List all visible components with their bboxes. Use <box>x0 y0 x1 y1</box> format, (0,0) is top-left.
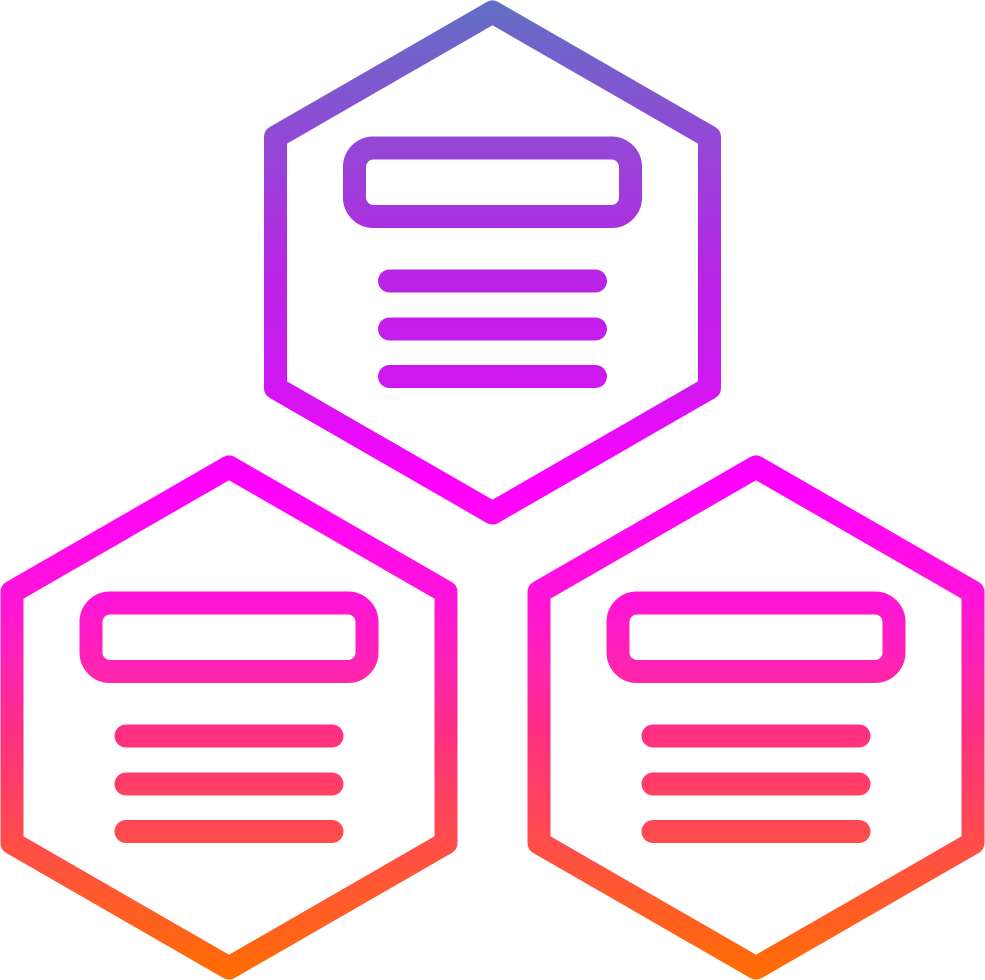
text lines: bottom-left <box>126 736 332 832</box>
header box: bottom-left <box>91 603 367 672</box>
panel: bottom-left hexagon <box>12 467 446 968</box>
text lines: bottom-right <box>653 736 859 832</box>
text lines: top <box>390 281 596 376</box>
header box: bottom-right <box>618 603 894 672</box>
hexagon outline: top <box>276 12 710 513</box>
header box: top <box>354 148 630 216</box>
panel: top hexagon <box>276 12 710 513</box>
panel: bottom-right hexagon <box>539 467 973 968</box>
hexagon outline: bottom-left <box>12 467 446 968</box>
hexagon outline: bottom-right <box>539 467 973 968</box>
